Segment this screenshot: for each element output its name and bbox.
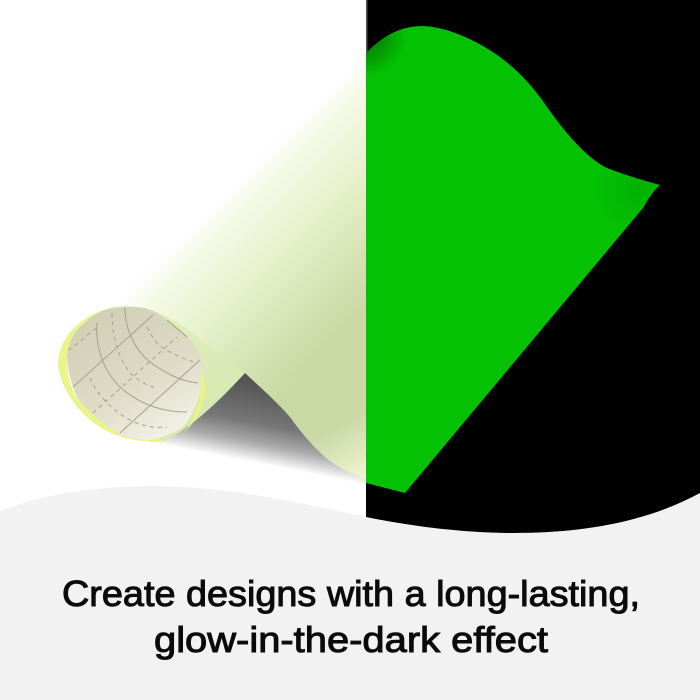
caption text — [62, 573, 640, 660]
illustration: pale vinyl sheet in daylight — [122, 62, 366, 479]
divider edge between day and night — [366, 0, 368, 52]
caption text: glow-in-the-dark effect — [154, 619, 548, 660]
illustration: vinyl roll end — [58, 306, 245, 442]
panel: gray caption wave — [0, 486, 700, 700]
shadow under the roll — [157, 373, 366, 482]
paper backing interior — [67, 307, 203, 440]
right yellow crescent — [180, 370, 205, 436]
yellow rim — [58, 306, 165, 441]
caption text: Create designs with a long-lasting, — [62, 573, 640, 614]
outer sheet wrap — [123, 306, 245, 442]
black night panel — [366, 0, 700, 540]
illustration: glowing green vinyl sheet — [366, 26, 660, 493]
backing grid lines — [68, 308, 200, 433]
